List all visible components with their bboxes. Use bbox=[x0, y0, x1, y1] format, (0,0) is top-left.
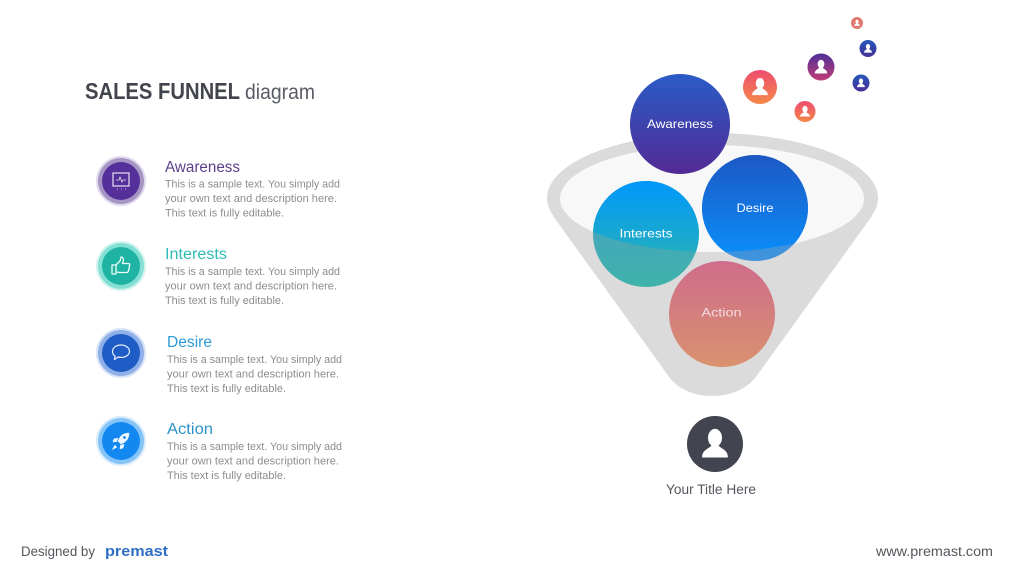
circle: Awareness bbox=[630, 74, 730, 174]
description: This text is fully editable. bbox=[165, 208, 284, 220]
description: This text is fully editable. bbox=[167, 383, 286, 395]
heading: Interests bbox=[165, 246, 227, 263]
heading: Action bbox=[167, 421, 213, 438]
icon: person blue lower bbox=[852, 74, 870, 92]
icon: thumbs up bbox=[96, 241, 146, 291]
description: This is a sample text. You simply add bbox=[165, 178, 340, 190]
heading: Awareness bbox=[165, 159, 240, 176]
circle: Action bbox=[669, 261, 775, 367]
footer: designed by: Designed by bbox=[21, 544, 95, 559]
footer: premast logo: premast bbox=[105, 543, 168, 560]
description bbox=[167, 441, 342, 482]
icon: person purple bbox=[808, 54, 834, 80]
icon: presentation screen bbox=[96, 156, 146, 206]
description: your own text and description here. bbox=[165, 280, 337, 292]
footer: website: www.premast.com bbox=[875, 544, 993, 559]
description bbox=[167, 354, 342, 395]
circle: Desire bbox=[702, 155, 808, 261]
item: Action bbox=[96, 416, 342, 482]
item: Desire bbox=[96, 328, 342, 395]
circle: Interests bbox=[593, 181, 699, 287]
your title label: Your Title Here bbox=[666, 482, 756, 497]
description: your own text and description here. bbox=[167, 368, 339, 380]
icon: person red small bbox=[794, 101, 816, 122]
circle: Action: Action bbox=[702, 306, 742, 320]
heading: Desire bbox=[167, 334, 212, 351]
item: Interests bbox=[96, 241, 340, 307]
icon: person tiny bbox=[851, 17, 863, 29]
icon: person red large bbox=[743, 70, 777, 104]
circle: Desire: Desire bbox=[736, 201, 774, 215]
description: This is a sample text. You simply add bbox=[167, 354, 342, 366]
circle: Interests: Interests bbox=[620, 226, 672, 240]
description: This is a sample text. You simply add bbox=[165, 266, 340, 278]
icon: person blue upper bbox=[860, 40, 876, 57]
title: SALES FUNNEL bbox=[85, 78, 240, 104]
icon: person dark bbox=[687, 416, 743, 472]
funnel bbox=[547, 133, 878, 396]
title: diagram bbox=[245, 81, 315, 104]
description: your own text and description here. bbox=[165, 193, 337, 205]
description: This text is fully editable. bbox=[165, 295, 284, 307]
item: Awareness bbox=[96, 156, 340, 220]
description: your own text and description here. bbox=[167, 456, 339, 468]
circle: Awareness: Awareness bbox=[647, 117, 713, 131]
description: This is a sample text. You simply add bbox=[167, 441, 342, 453]
description bbox=[165, 266, 340, 307]
icon: speech bubble bbox=[96, 328, 146, 378]
description: This text is fully editable. bbox=[167, 470, 286, 482]
description bbox=[165, 178, 340, 220]
icon: rocket bbox=[96, 416, 146, 466]
